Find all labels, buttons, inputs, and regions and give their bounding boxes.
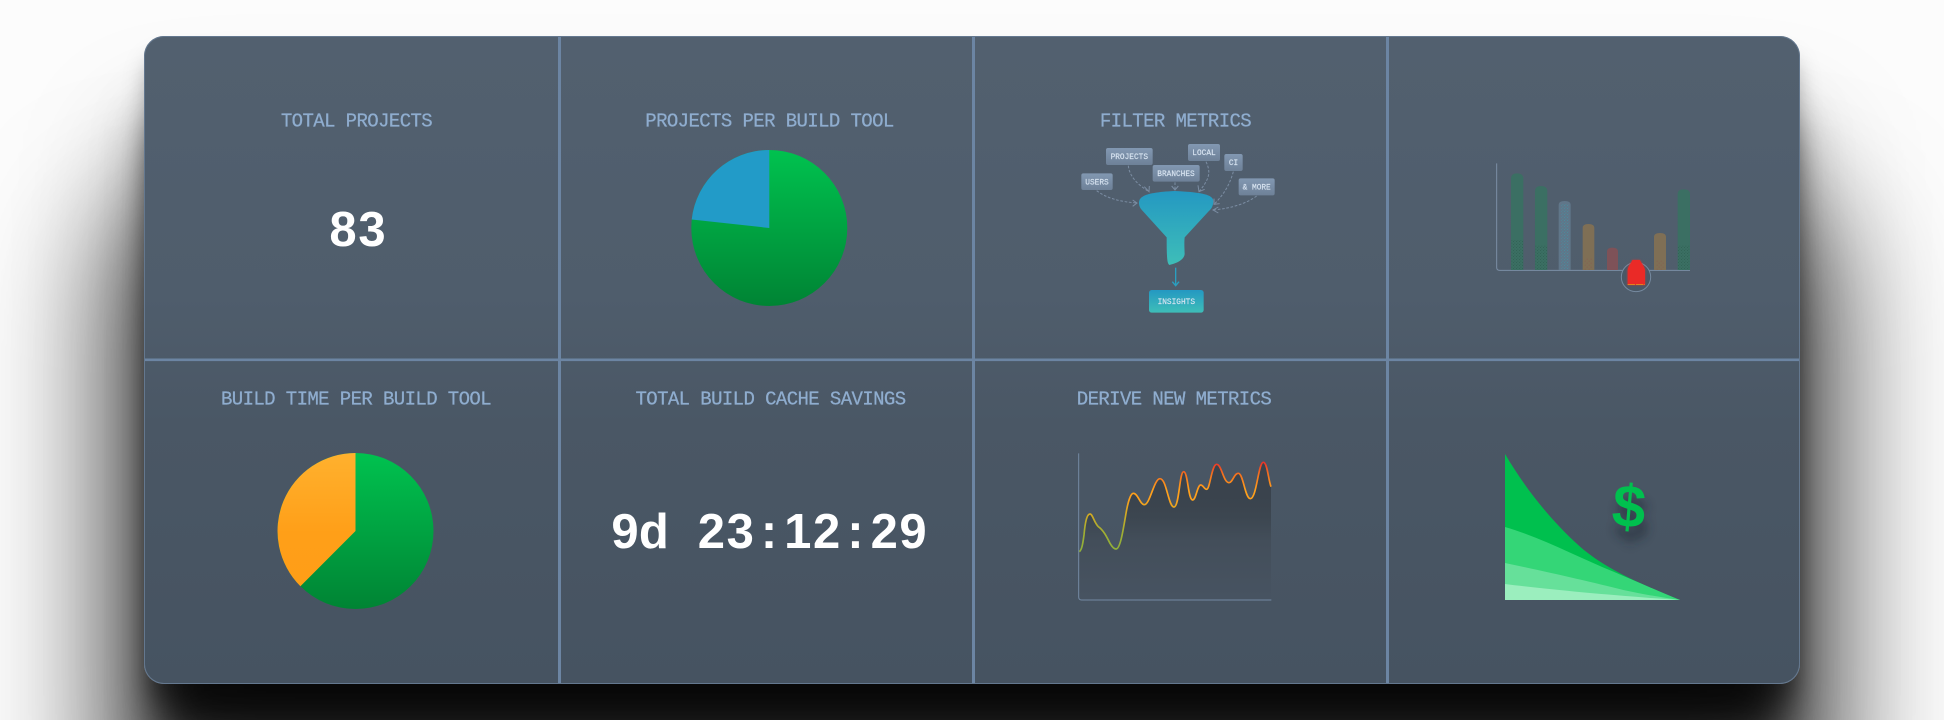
area line chart [1079, 453, 1271, 600]
icon: highlighted anomaly bar [1621, 260, 1651, 292]
value: cache savings time: 9d 23:12:29 [611, 505, 927, 559]
heading: build time per build tool: BUILD TIME PER BUILD TOOL [221, 388, 491, 410]
heading: filter metrics: FILTER METRICS [1100, 110, 1251, 132]
bar chart [1497, 163, 1690, 292]
panel: bar chart with anomaly [1389, 37, 1799, 358]
dashboard panel [144, 36, 1800, 684]
heading: total projects: TOTAL PROJECTS [281, 110, 432, 132]
icon: dollar sign: $ [1609, 472, 1649, 541]
heading: derive new metrics: DERIVE NEW METRICS [1077, 388, 1271, 410]
panel: total projects [145, 37, 558, 358]
funnel diagram: LOCAL [1192, 150, 1216, 158]
funnel diagram: INSIGHTS [1158, 299, 1195, 307]
funnel diagram: PROJECTS [1111, 154, 1148, 162]
funnel diagram [1081, 144, 1275, 313]
pie chart: projects per build tool [691, 150, 847, 306]
heading: projects per build tool: PROJECTS PER BUILD TOOL [645, 110, 894, 132]
panel: filter metrics [975, 37, 1386, 358]
funnel diagram: BRANCHES [1157, 171, 1195, 179]
panel: savings chart [1389, 361, 1799, 683]
funnel diagram: & MORE [1243, 184, 1271, 192]
stacked area chart [1505, 454, 1680, 600]
panel: build time per build tool [145, 361, 558, 683]
heading: total build cache savings: TOTAL BUILD CACHE SAVINGS [635, 388, 906, 410]
funnel diagram: USERS [1085, 180, 1109, 188]
icon: dollar sign: $ [1612, 485, 1651, 554]
panel: projects per build tool [561, 37, 972, 358]
pie chart: build time per build tool [278, 453, 434, 609]
funnel diagram: CI [1229, 160, 1238, 168]
panel: total build cache savings [561, 361, 972, 683]
panel: derive new metrics [975, 361, 1386, 683]
value: 83: 83 [329, 203, 386, 257]
